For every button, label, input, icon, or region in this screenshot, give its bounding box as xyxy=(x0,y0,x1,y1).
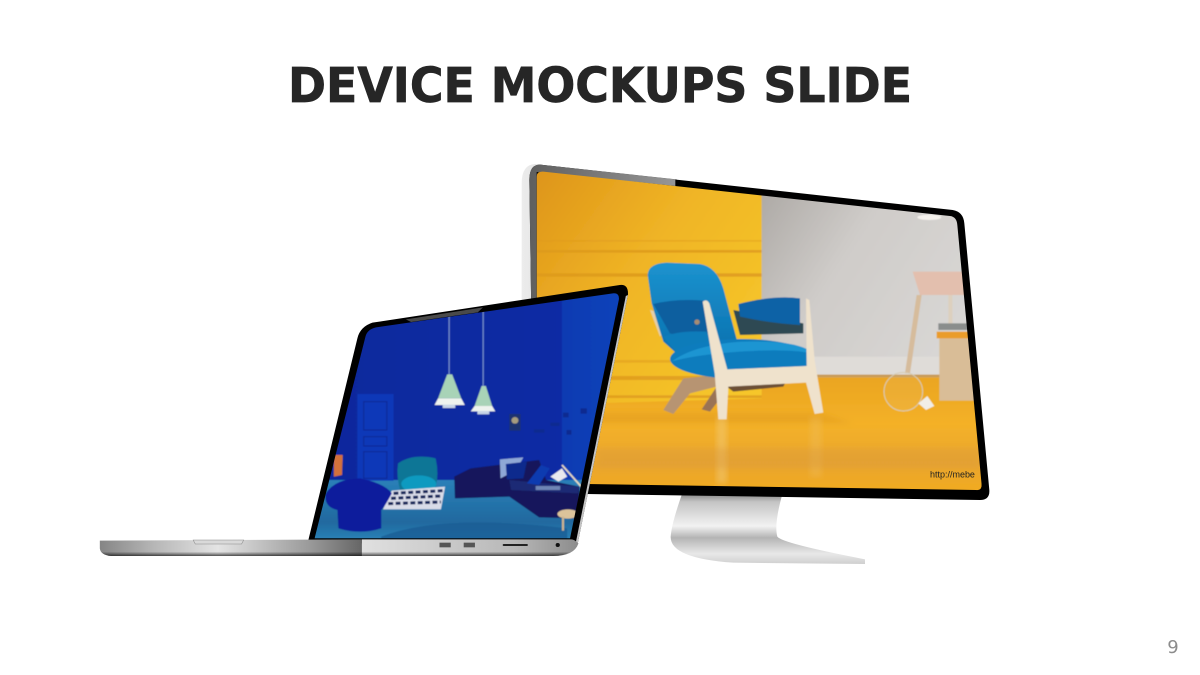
blue pouf xyxy=(325,478,392,532)
trackpad notch xyxy=(193,540,244,544)
laptop xyxy=(100,285,628,556)
blue floor xyxy=(314,479,582,538)
teal armchair xyxy=(397,457,437,493)
watermark url: http://mebe xyxy=(930,469,975,479)
wall clock and pegs xyxy=(509,408,587,435)
camera bezel notch xyxy=(406,307,483,322)
navy sofa xyxy=(454,457,581,518)
yellow wall xyxy=(533,167,763,407)
laptop screen photo: blue room xyxy=(308,287,623,540)
pendant lamps xyxy=(435,310,495,414)
blue wall xyxy=(329,293,619,481)
laptop lid xyxy=(308,285,628,543)
glass bulb xyxy=(884,372,934,411)
floor xyxy=(533,377,987,493)
ceiling glare xyxy=(917,215,941,220)
armchair xyxy=(648,263,823,419)
side drum table xyxy=(937,323,977,401)
card slot xyxy=(503,544,528,546)
monitor screen photo: yellow room with blue armchair xyxy=(533,167,988,493)
monitor stand xyxy=(671,495,865,564)
monitor frame xyxy=(522,164,989,500)
wall mouldings xyxy=(537,240,763,398)
small plant table xyxy=(334,455,343,477)
page number: 9 xyxy=(1167,637,1179,658)
grey wall xyxy=(762,167,988,380)
headphone jack xyxy=(556,543,560,547)
side table xyxy=(557,509,578,531)
door xyxy=(357,394,394,481)
baseboard xyxy=(762,357,988,375)
laptop base xyxy=(100,539,578,556)
usb ports xyxy=(439,543,451,547)
title: DEVICE MOCKUPS SLIDE xyxy=(288,58,912,114)
lid highlight xyxy=(576,295,628,543)
floor shadow and reflections xyxy=(602,415,832,422)
monitor xyxy=(522,164,989,564)
bar stool xyxy=(905,272,967,373)
patterned rug xyxy=(383,487,445,509)
